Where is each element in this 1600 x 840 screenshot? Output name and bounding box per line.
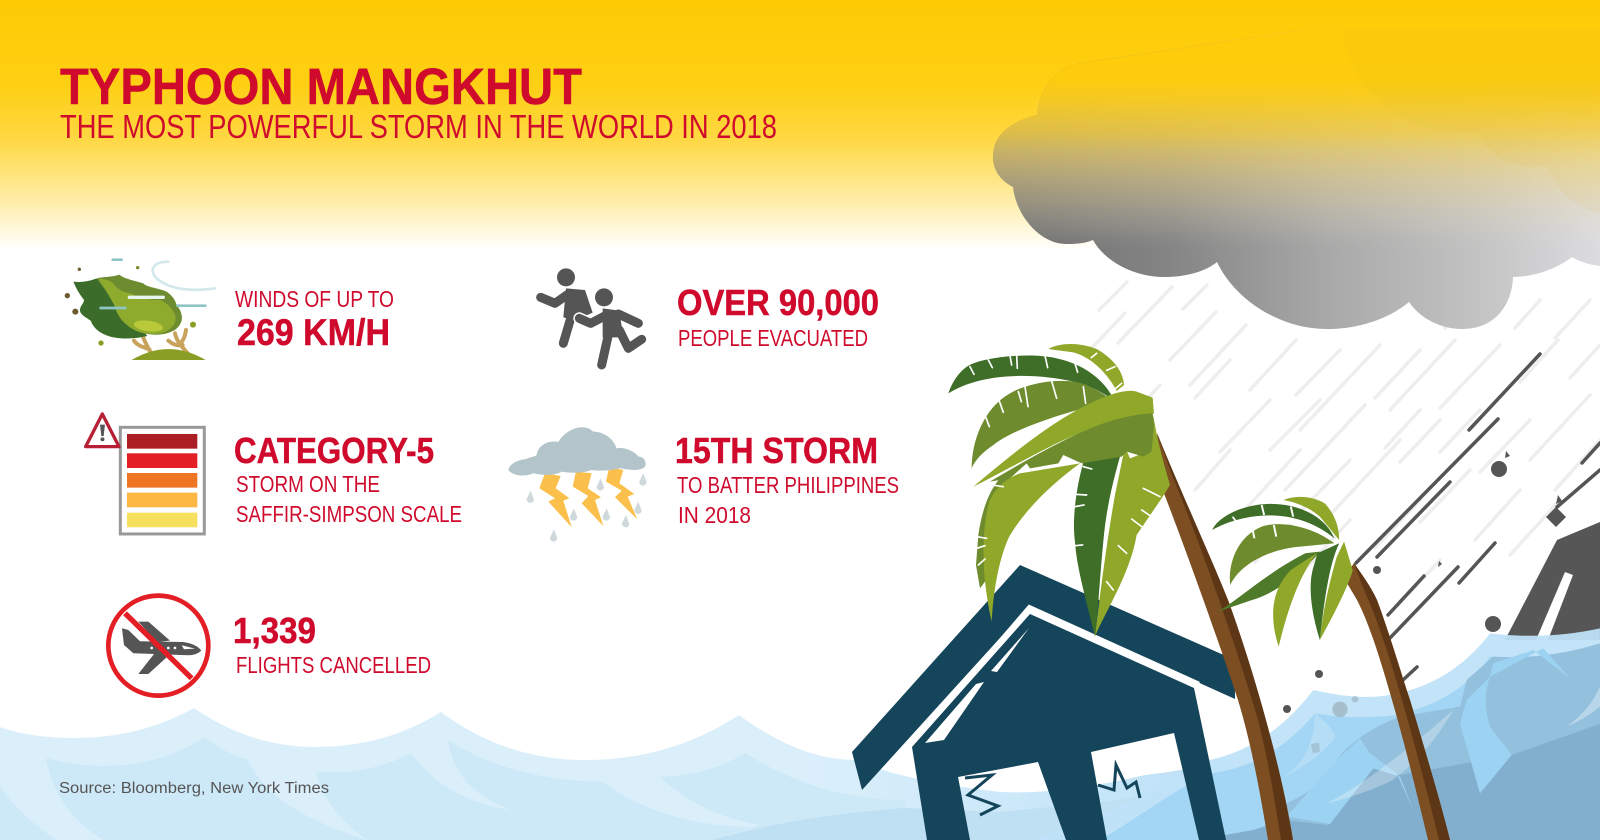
storm debris streaks and dots [1283, 354, 1600, 713]
title: TYPHOON MANGKHUT [60, 58, 582, 115]
icon: running people [541, 268, 642, 365]
storm count text [675, 430, 899, 528]
category text: STORM ON THE [236, 471, 380, 497]
waves right [1033, 628, 1600, 840]
category text [234, 430, 462, 527]
category text: SAFFIR-SIMPSON SCALE [236, 501, 462, 527]
house [852, 565, 1235, 840]
source: Source: Bloomberg, New York Times [59, 780, 329, 797]
storm count text: TO BATTER PHILIPPINES [677, 472, 899, 498]
winds text [235, 286, 394, 353]
yellow sky background [0, 0, 1600, 250]
flights text: FLIGHTS CANCELLED [236, 652, 431, 678]
icon: storm cloud with lightning [508, 427, 647, 542]
people text: PEOPLE EVACUATED [678, 325, 868, 351]
waves left [0, 708, 1300, 840]
category text: CATEGORY-5 [234, 430, 434, 471]
subtitle: THE MOST POWERFUL STORM IN THE WORLD IN 2018 [60, 108, 777, 145]
grey house in the distance [1505, 522, 1600, 640]
big palm crown [948, 344, 1170, 637]
storm count text: IN 2018 [678, 502, 751, 528]
icon: no flights [108, 596, 208, 696]
big palm trunk [1157, 433, 1293, 840]
flights text [233, 610, 431, 678]
icon: warning scale [86, 414, 204, 534]
icon: tree in wind [65, 260, 215, 360]
storm count text: 15TH STORM [675, 430, 878, 471]
small palm trunk [1344, 563, 1450, 840]
winds text: 269 KM/H [237, 312, 390, 353]
people text [677, 282, 879, 351]
winds text: WINDS OF UP TO [235, 286, 394, 312]
rain streaks [1090, 282, 1600, 592]
people text: OVER 90,000 [677, 282, 879, 323]
flights text: 1,339 [233, 610, 316, 651]
storm cloud [993, 30, 1600, 329]
white reflections [925, 628, 1029, 743]
small palm crown [1212, 497, 1353, 647]
